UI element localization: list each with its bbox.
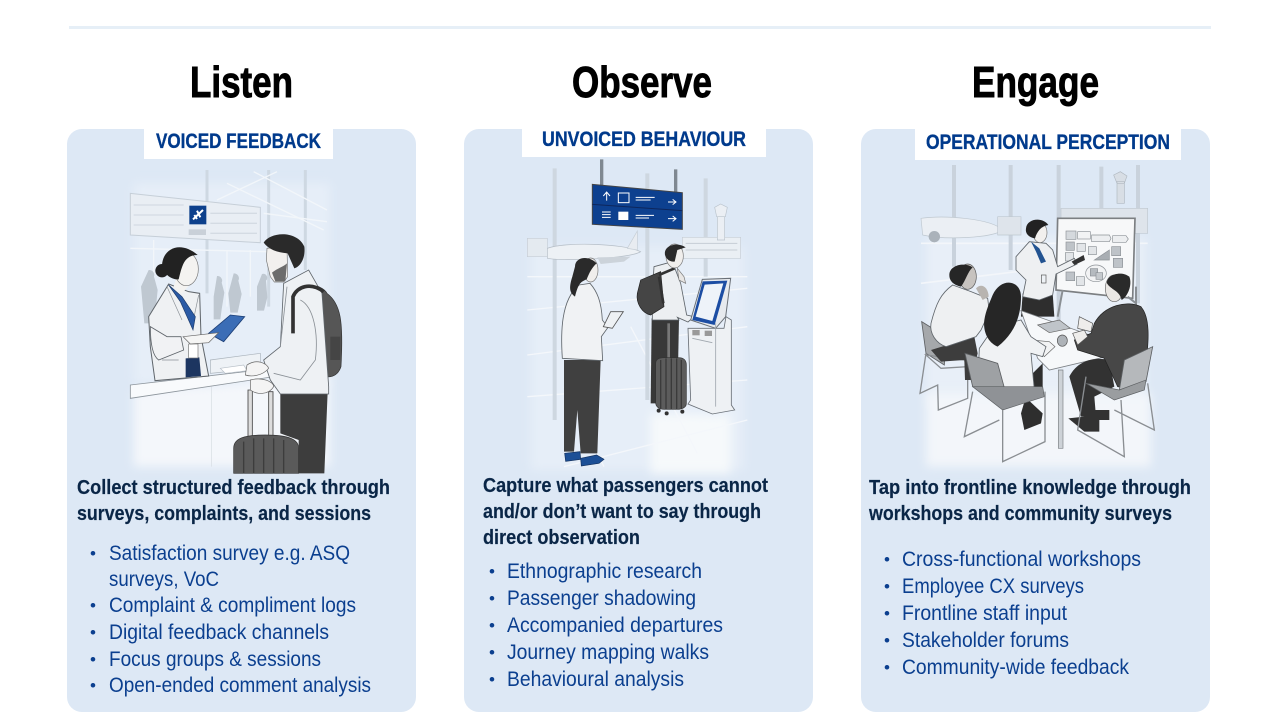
illustration: observer watching a passenger at a kiosk <box>527 159 747 473</box>
bullet list: observe methods: Journey mapping walks <box>507 641 709 664</box>
card: Observe background <box>464 129 813 712</box>
bullet list: listen methods: • <box>90 650 96 669</box>
man <box>294 284 342 377</box>
bullet list: engage methods: • <box>884 577 890 596</box>
subheading: tap into frontline knowledge: workshops and community surveys <box>868 502 1172 525</box>
bullet list: engage methods: • <box>884 550 890 569</box>
bullet list: listen methods: • <box>90 596 96 615</box>
bullet list: listen methods: • <box>90 676 96 695</box>
card: Engage background <box>861 129 1210 712</box>
bullet list: listen methods: surveys, VoC <box>109 568 219 591</box>
window scene <box>921 217 1003 238</box>
panel: Observe <box>464 58 813 712</box>
tag: operational perception: OPERATIONAL PERCEPTION <box>926 131 1170 154</box>
bullet list: observe methods: • <box>489 589 495 608</box>
bullet list: engage methods <box>884 548 1141 679</box>
bullet list: engage methods: Frontline staff input <box>902 602 1067 625</box>
bullet list: observe methods: Accompanied departures <box>507 614 723 637</box>
bullet list: observe methods: • <box>489 616 495 635</box>
bullet list: listen methods: • <box>90 544 96 563</box>
crowd <box>141 270 267 323</box>
tag: unvoiced behaviour: UNVOICED BEHAVIOUR <box>542 128 746 151</box>
bullet list: engage methods: Cross-functional workshops <box>902 548 1141 571</box>
bullet list: listen methods: Complaint & compliment logs <box>109 594 356 617</box>
left seated person <box>922 322 946 365</box>
bullet list: listen methods: Open-ended comment analysis <box>109 674 371 697</box>
subheading: capture what passengers cannot say: direct observation <box>483 526 640 549</box>
subheading: capture what passengers cannot say: and/or don’t want to say through <box>483 500 761 523</box>
bullet list: engage methods: Stakeholder forums <box>902 629 1069 652</box>
illustration: facilitator leading a staff workshop <box>920 165 1154 467</box>
bullet list: engage methods: Employee CX surveys <box>902 575 1084 598</box>
subheading: capture what passengers cannot say <box>483 474 768 549</box>
bullet list: observe methods: Ethnographic research <box>507 560 702 583</box>
subheading: collect structured feedback <box>77 476 390 525</box>
subheading: tap into frontline knowledge <box>868 476 1191 525</box>
bullet list: observe methods: • <box>489 670 495 689</box>
right seated person <box>1068 359 1114 432</box>
panel: Listen <box>67 58 416 712</box>
suitcase <box>667 323 670 358</box>
table <box>1021 311 1106 370</box>
subheading: capture what passengers cannot say: Capture what passengers cannot <box>483 474 768 497</box>
tag: voiced feedback: VOICED FEEDBACK <box>156 130 321 153</box>
bullet list: engage methods: • <box>884 604 890 623</box>
bullet list: listen methods <box>90 542 371 697</box>
subheading: tap into frontline knowledge: Tap into frontline knowledge through <box>869 476 1191 499</box>
bullet list: observe methods: Behavioural analysis <box>507 668 684 691</box>
board <box>1056 218 1135 298</box>
counter <box>130 368 274 398</box>
bullet list: engage methods: Community-wide feedback <box>902 656 1129 679</box>
sign <box>600 159 677 193</box>
bullet list: listen methods: • <box>90 623 96 642</box>
bullet list: observe methods: • <box>489 562 495 581</box>
bullet list: engage methods: • <box>884 658 890 677</box>
bullet list: observe methods: Passenger shadowing <box>507 587 696 610</box>
bullet list: observe methods: • <box>489 643 495 662</box>
bullet list: listen methods: Digital feedback channels <box>109 621 329 644</box>
subheading: collect structured feedback: surveys, complaints, and sessions <box>77 502 371 525</box>
heading: Observe: Observe <box>572 58 712 107</box>
woman <box>564 360 601 453</box>
heading: Listen: Listen <box>190 58 293 107</box>
panel: Engage <box>861 58 1210 712</box>
heading: Engage: Engage <box>972 58 1099 107</box>
woman seated <box>1018 363 1043 430</box>
window scene <box>527 238 547 257</box>
suitcase <box>248 390 273 437</box>
man <box>651 318 679 403</box>
woman <box>149 284 209 381</box>
bullet list: engage methods: • <box>884 631 890 650</box>
illustration: staff member and passenger at a check-in counter <box>130 170 342 473</box>
subheading: collect structured feedback: Collect structured feedback through <box>77 476 390 499</box>
kiosk <box>688 317 735 414</box>
bullet list: listen methods: Satisfaction survey e.g. ASQ <box>109 542 350 565</box>
bullet list: listen methods: Focus groups & sessions <box>109 648 321 671</box>
presenter <box>1021 293 1054 317</box>
tag: operational perception <box>915 129 1181 160</box>
tag: unvoiced behaviour <box>522 128 766 157</box>
tag: voiced feedback <box>144 129 333 159</box>
card: Listen background <box>67 129 416 712</box>
bullet list: observe methods <box>489 560 723 691</box>
